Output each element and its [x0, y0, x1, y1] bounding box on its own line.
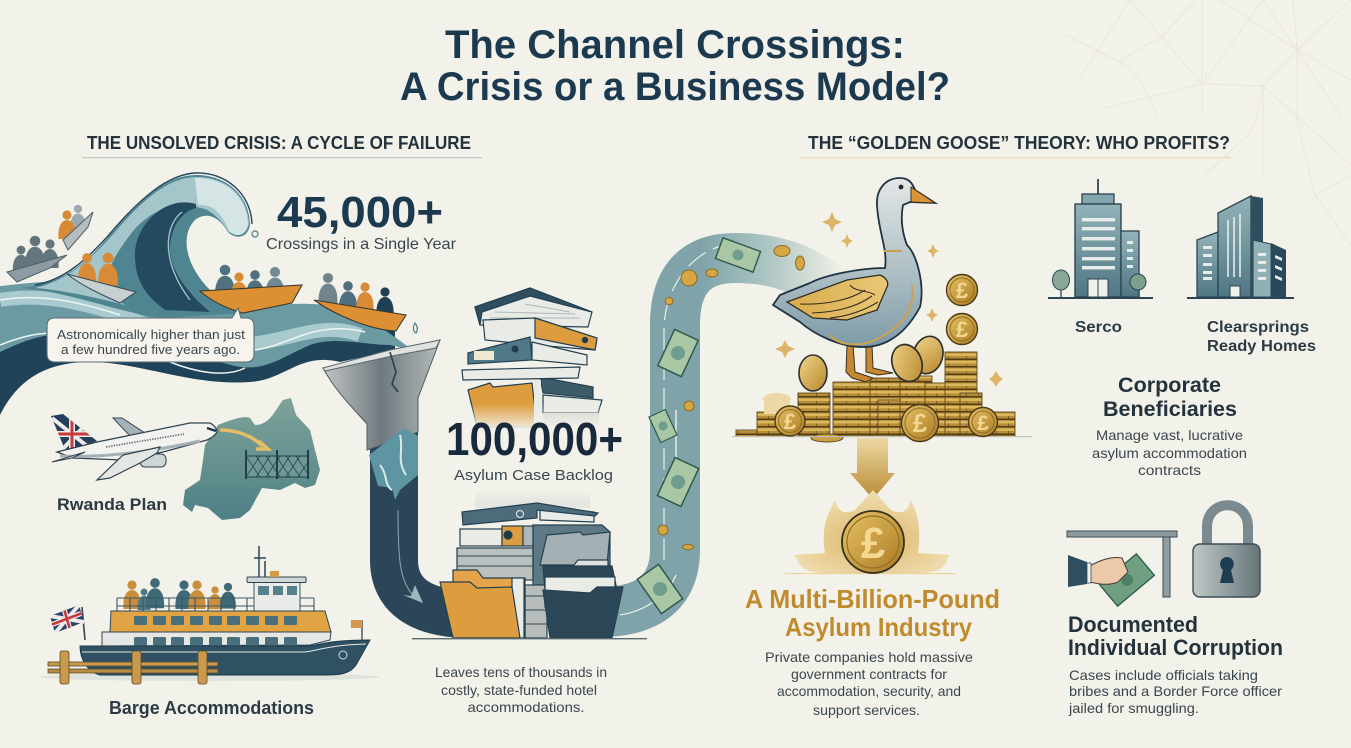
boat: orange centre: [200, 265, 302, 313]
wave body: [20, 175, 250, 318]
grey books: [457, 548, 533, 580]
icon: bribe under table: [1067, 531, 1177, 606]
title: A Crisis or a Business Model?: [400, 65, 950, 109]
orange folder: [453, 570, 525, 638]
white papers: [462, 367, 580, 380]
label: Clearsprings Ready Homes: Ready Homes: [1207, 338, 1316, 355]
label: Clearsprings Ready Homes: [1207, 319, 1316, 355]
text: hotel accommodations: accommodations.: [468, 699, 584, 715]
heading: documented corruption: [1068, 612, 1283, 660]
text: manage contracts: contracts: [1138, 462, 1201, 478]
stat: 45,000+: [266, 188, 457, 253]
icon: Serco building: [1048, 179, 1153, 299]
heading: corporate beneficiaries: Beneficiaries: [1103, 398, 1237, 421]
white book: [543, 395, 602, 413]
text: cases: jailed for smuggling.: [1068, 700, 1199, 716]
icon: banknotes: [637, 238, 761, 614]
icon: pound coins: [775, 274, 998, 442]
text: cases: Cases include officials taking: [1069, 667, 1258, 683]
label: Serco: Serco: [1075, 319, 1122, 336]
teal binder: [468, 337, 532, 364]
text: private companies: support services.: [813, 702, 920, 718]
boat: white middle: [67, 253, 136, 303]
heading: golden goose: THE “GOLDEN GOOSE” THEORY: WHO PROFITS?: [808, 133, 1230, 153]
ground line under coins: [732, 436, 1032, 437]
wave dark curl: [135, 202, 210, 312]
teal binder pages: [532, 342, 587, 365]
boats with people: [7, 205, 406, 331]
text: cases: [1068, 667, 1282, 716]
icon: trees: [1052, 270, 1146, 297]
text: manage contracts: asylum accommodation: [1092, 445, 1247, 461]
heading: multi-billion-pound: [745, 584, 1000, 642]
text: hotel accommodations: [435, 664, 607, 715]
stat: 45,000+: 45,000+: [277, 188, 443, 237]
orange binder: [483, 318, 597, 350]
Union flag: [50, 605, 85, 640]
heading: multi-billion-pound: A Multi-Billion-Pound: [745, 584, 1000, 614]
dark underside of river: [0, 320, 395, 415]
icon: small falling coins: [658, 246, 804, 550]
label: Rwanda Plan: Rwanda Plan: [57, 495, 167, 514]
dark folder: [543, 566, 617, 590]
icon: pound coins: £: [913, 408, 928, 438]
text: hotel accommodations: Leaves tens of thousands in: [435, 664, 607, 680]
icon: barge: [40, 546, 380, 684]
text: private companies: [765, 649, 973, 718]
icon: lower file stack: [440, 490, 623, 638]
river and wave: [0, 173, 417, 415]
icon: pound coins: £: [956, 278, 969, 303]
stern flag: [351, 620, 362, 640]
dock fence: [48, 651, 218, 684]
boat: grey upper left: [7, 205, 93, 282]
geometric background lines: [1065, 0, 1351, 245]
body: [773, 178, 935, 347]
spray drops: [252, 231, 258, 237]
text: private companies: government contracts for: [791, 666, 947, 682]
icon: pound coins: £: [784, 409, 797, 434]
icon: plane: [50, 412, 217, 480]
icon: Rwanda map: [183, 398, 320, 520]
top binder: [540, 506, 594, 522]
orange deck: [110, 611, 331, 632]
text: private companies: Private companies hold massive: [765, 649, 973, 665]
icon: padlock: [1193, 505, 1260, 597]
heading: corporate beneficiaries: [1103, 374, 1237, 421]
stat: 45,000+: Crossings in a Single Year: [266, 236, 457, 253]
heading: multi-billion-pound: Asylum Industry: [785, 612, 972, 642]
beak: [911, 187, 935, 203]
grey folder: [533, 525, 610, 590]
mid teal river band: [0, 281, 412, 367]
money road: [600, 238, 838, 615]
label: Clearsprings Ready Homes: Clearsprings: [1207, 319, 1309, 336]
heading: documented corruption: Individual Corruption: [1068, 635, 1283, 660]
title: The Channel Crossings:: [445, 23, 905, 67]
stat: 100,000+: Asylum Case Backlog: [454, 467, 613, 484]
icon: golden goose: [773, 178, 935, 382]
callout: astronomically higher: Astronomically higher than just: [57, 327, 245, 342]
icon: coin stacks: [736, 352, 1015, 442]
orange binder: [460, 529, 502, 546]
dark binder: [540, 377, 593, 398]
boat: orange right: [314, 273, 406, 331]
text: cases: bribes and a Border Force officer: [1069, 683, 1282, 699]
middle stack: [525, 585, 547, 638]
callout: astronomically higher: [47, 308, 254, 362]
text: manage contracts: [1092, 427, 1247, 478]
heading: corporate beneficiaries: Corporate: [1118, 374, 1221, 397]
text: private companies: accommodation, security, and: [777, 683, 961, 699]
icon: upper file stack: [462, 288, 607, 430]
cabin: [254, 582, 300, 611]
arrow: down to industry: [850, 438, 895, 499]
top book: [475, 288, 592, 327]
railing: [117, 598, 314, 611]
heading: unsolved crisis: THE UNSOLVED CRISIS: A CYCLE OF FAILURE: [87, 133, 471, 153]
icon: pound coins: £: [956, 317, 969, 342]
heading: documented corruption: Documented: [1068, 612, 1198, 637]
icon: sparkles: [775, 212, 1003, 387]
icon: golden eggs: [799, 333, 947, 391]
text: manage contracts: Manage vast, lucrative: [1096, 427, 1243, 443]
legs: [846, 345, 873, 382]
icon: pound coins: £: [977, 412, 989, 435]
stat: 100,000+: [446, 413, 623, 484]
icon: big pound coin with flame: [785, 490, 955, 574]
arrow: down the pipe: [398, 510, 423, 603]
arrow: to fence: [220, 430, 268, 449]
text: hotel accommodations: costly, state-funded hotel: [441, 682, 597, 698]
callout: astronomically higher: a few hundred five years ago.: [61, 342, 240, 357]
hull: [80, 640, 370, 675]
wave light outer face: [35, 177, 249, 305]
people on deck: [123, 578, 236, 610]
label: Barge Accommodations: Barge Accommodations: [109, 698, 314, 718]
title: [400, 23, 950, 109]
wing: [787, 275, 888, 320]
ground line: [412, 638, 647, 639]
orange folder: [468, 383, 537, 427]
icon: fence: [246, 450, 308, 479]
stat: 100,000+: 100,000+: [446, 413, 623, 465]
white deck: [102, 632, 331, 646]
funnel and dark pipe: [323, 340, 470, 614]
icon: Clearsprings building: [1187, 196, 1294, 299]
icon: big pound coin with flame: £: [861, 519, 886, 568]
